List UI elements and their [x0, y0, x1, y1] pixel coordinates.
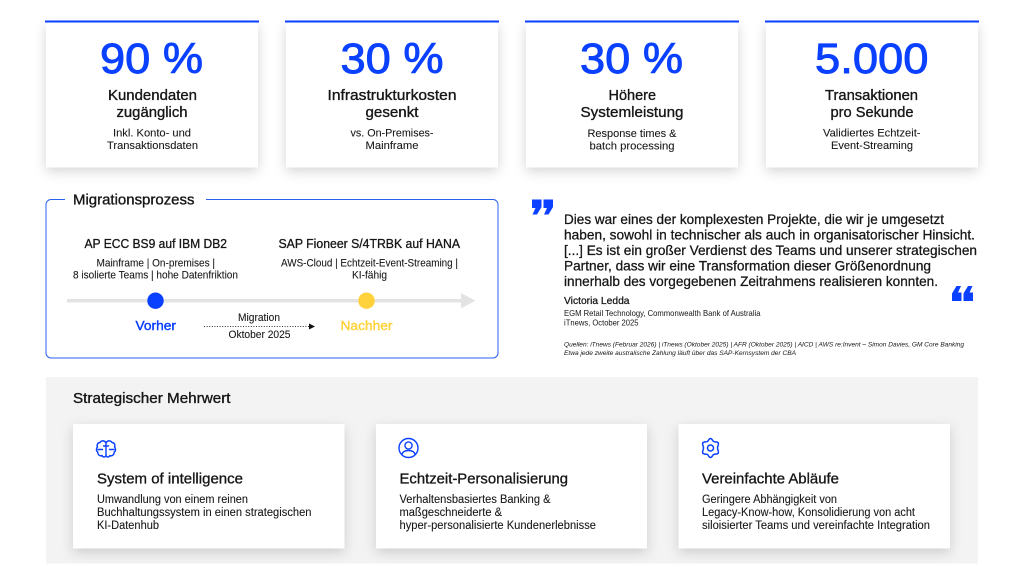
card: System of intelligence: System of intelligence: [97, 472, 243, 488]
card: System of intelligence: Umwandlung von einem reinen: [97, 494, 248, 506]
card: Vereinfachte Abläufe: siloisierter Teams und vereinfachte Integration: [702, 520, 930, 532]
marker: Nachher: [358, 292, 375, 309]
quote attribution: EGM Retail Technology, Commonwealth Bank of Australia: [564, 308, 761, 318]
marker: Vorher: [147, 292, 164, 309]
panel: KPI Transaktionen: Validiertes Echtzeit-: [823, 128, 921, 140]
sources: [564, 342, 964, 357]
panel: KPI Transaktionen: pro Sekunde: [830, 105, 914, 121]
panel: KPI Transaktionen: Transaktionen: [825, 88, 918, 104]
text: target system: KI-fähig: [352, 270, 387, 282]
panel: Migrationsprozess: [46, 192, 498, 358]
icon: person: [399, 438, 418, 458]
panel: KPI Infrastrukturkosten: [285, 20, 499, 168]
panel: KPI Transaktionen: 5.000: [815, 35, 928, 83]
quote text: [...] Es ist ein großer Verdienst des Teams und unserer strategischen: [564, 242, 977, 258]
quote text: haben, sowohl in technischer als auch in organisatorischer Hinsicht.: [564, 226, 975, 242]
text: source system: Mainframe | On-premises |: [96, 258, 215, 270]
panel: KPI Infrastrukturkosten: gesenkt: [366, 105, 418, 121]
text: target system: [278, 237, 461, 282]
card: System of intelligence: Buchhaltungssystem in einen strategischen: [97, 507, 312, 519]
panel: KPI Systemleistung: Systemleistung: [580, 105, 684, 121]
panel: KPI Kundendaten: Inkl. Konto- und: [113, 128, 191, 140]
panel: KPI Systemleistung: Höhere: [608, 88, 656, 104]
panel: Strategischer Mehrwert: [46, 377, 978, 564]
card: Echtzeit-Personalisierung: [376, 424, 647, 548]
panel: KPI Systemleistung: Response times &: [588, 128, 677, 140]
card: Vereinfachte Abläufe: [678, 424, 950, 548]
panel: KPI Transaktionen: Event-Streaming: [831, 140, 913, 152]
card: System of intelligence: [73, 424, 344, 548]
panel: KPI Infrastrukturkosten: Infrastrukturkosten: [328, 88, 456, 104]
text: target system: AWS-Cloud | Echtzeit-Event-Streaming |: [281, 258, 458, 270]
panel: KPI Kundendaten: Kundendaten: [108, 88, 197, 104]
timeline arrow: [67, 293, 476, 308]
panel: KPI Infrastrukturkosten: Mainframe: [366, 140, 418, 152]
label: Nachher: Nachher: [340, 318, 393, 333]
panel: KPI Infrastrukturkosten: vs. On-Premises-: [350, 128, 434, 140]
card: Echtzeit-Personalisierung: Echtzeit-Personalisierung: [400, 472, 568, 488]
card: Echtzeit-Personalisierung: hyper-personalisierte Kundenerlebnisse: [400, 520, 596, 532]
panel: KPI Kundendaten: zugänglich: [116, 105, 188, 121]
card: Vereinfachte Abläufe: Vereinfachte Abläufe: [702, 472, 839, 488]
panel: KPI Kundendaten: Transaktionsdaten: [107, 140, 198, 152]
quote text: Partner, dass wir eine Transformation dieser Größenordnung: [564, 258, 931, 274]
panel: KPI Systemleistung: [525, 20, 739, 168]
text: target system: SAP Fioneer S/4TRBK auf HANA: [278, 237, 461, 251]
text: source system: 8 isolierte Teams | hohe Datenfriktion: [73, 270, 238, 282]
text: source system: [73, 237, 238, 282]
quote attribution: [564, 296, 761, 328]
sources: Etwa jede zweite australische Zahlung läuft über das SAP-Kernsystem der CBA: [564, 350, 797, 357]
card: Echtzeit-Personalisierung: Verhaltensbasiertes Banking &: [400, 494, 551, 506]
sources: Quellen: iTnews (Februar 2026) | iTnews (Oktober 2025) | AFR (Oktober 2025) | AICD | AWS re:Invent – Simon Davies, GM Core Banking: [564, 342, 964, 348]
panel: KPI Kundendaten: 90 %: [100, 35, 203, 83]
arrow: Migration: [204, 312, 315, 341]
text: source system: AP ECC BS9 auf IBM DB2: [84, 237, 227, 251]
icon: opening quote mark: [532, 200, 553, 214]
panel: KPI Kundendaten: [45, 20, 259, 168]
arrow: Migration: Migration: [238, 312, 280, 324]
panel: KPI Transaktionen: [765, 20, 979, 168]
panel: KPI Systemleistung: batch processing: [590, 140, 674, 152]
arrow: Migration: Oktober 2025: [228, 329, 290, 341]
panel: KPI Infrastrukturkosten: 30 %: [340, 35, 444, 83]
card: Vereinfachte Abläufe: Legacy-Know-how, Konsolidierung von acht: [702, 507, 916, 519]
quote attribution: iTnews, October 2025: [564, 318, 639, 328]
quote text: [564, 211, 977, 289]
icon: gear: [703, 438, 718, 458]
icon: brain: [96, 441, 116, 457]
label: Vorher: Vorher: [136, 318, 177, 333]
heading: Strategischer Mehrwert: Strategischer Mehrwert: [73, 391, 230, 407]
quote attribution: Victoria Ledda: [564, 296, 630, 307]
card: Echtzeit-Personalisierung: maßgeschneiderte &: [400, 507, 502, 519]
card: Vereinfachte Abläufe: Geringere Abhängigkeit von: [702, 494, 837, 506]
heading: Migrationsprozess: Migrationsprozess: [73, 192, 194, 208]
icon: closing quote mark: [952, 286, 973, 301]
quote text: innerhalb des vorgegebenen Zeitrahmens realisieren konnten.: [564, 273, 938, 289]
quote text: Dies war eines der komplexesten Projekte, die wir je umgesetzt: [564, 211, 944, 227]
panel: KPI Systemleistung: 30 %: [580, 35, 683, 83]
card: System of intelligence: KI-Datenhub: [97, 520, 159, 532]
